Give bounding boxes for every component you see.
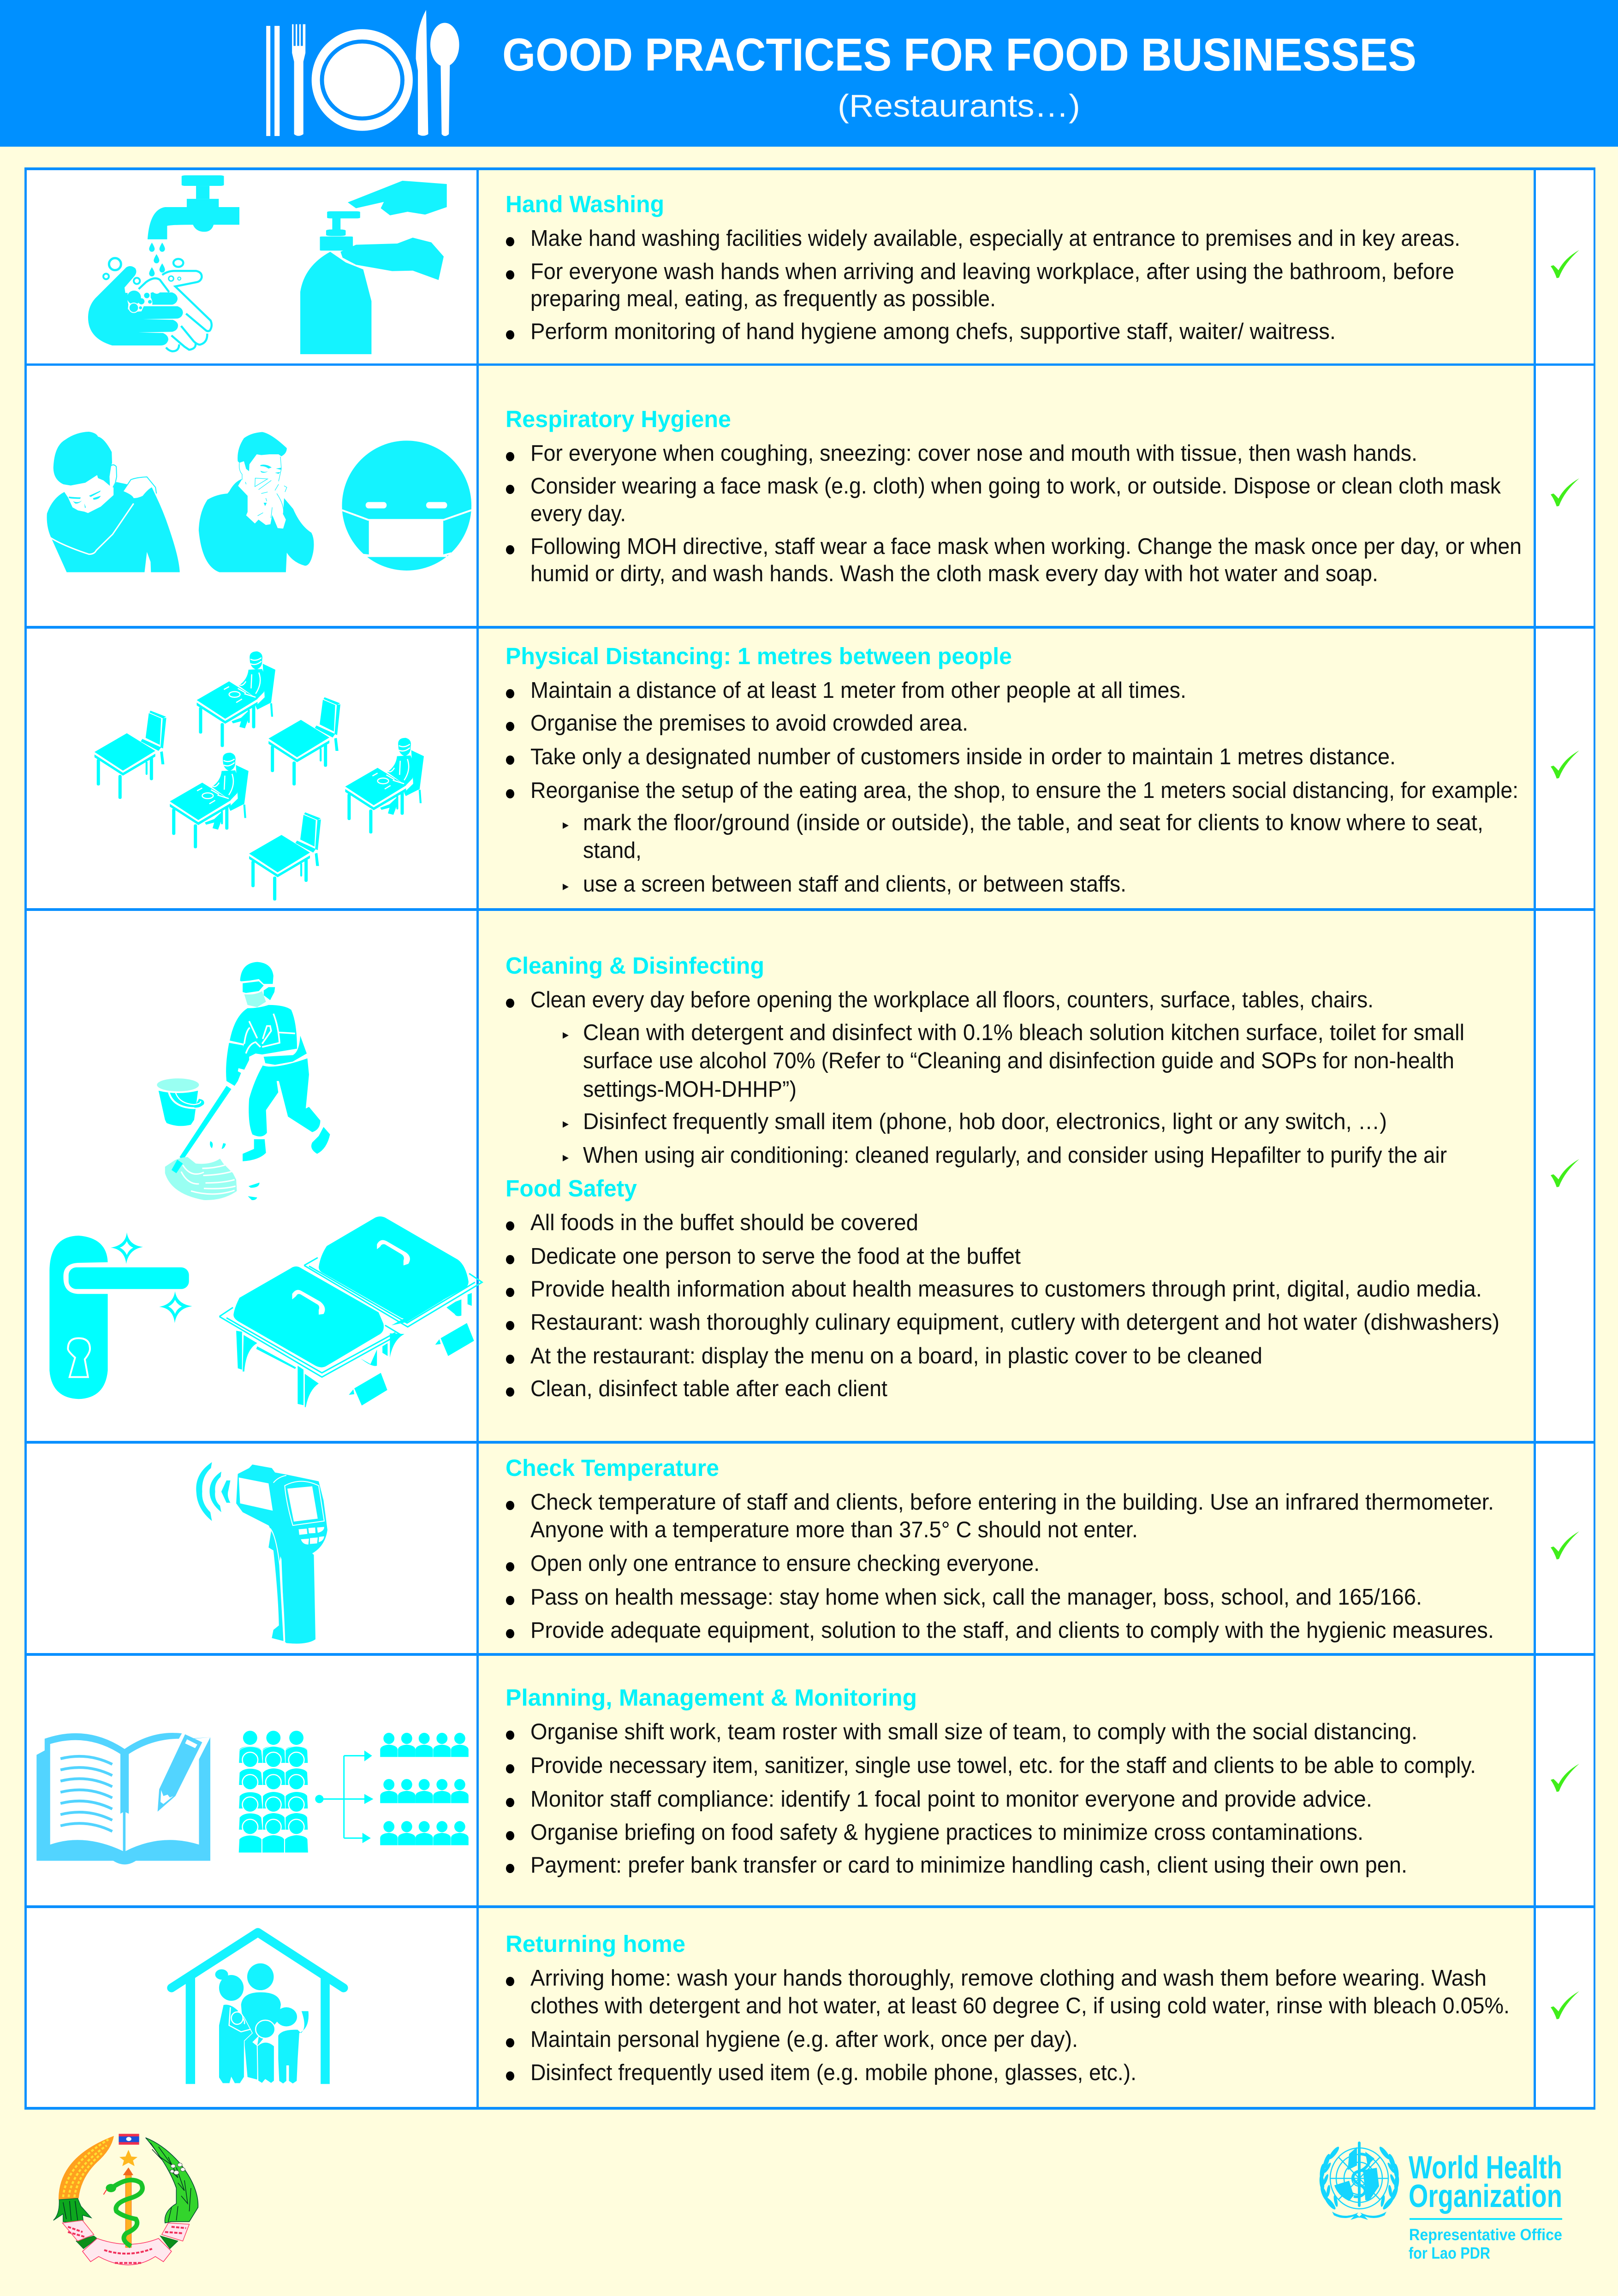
text: World Health Organization: World Health: [1409, 2149, 1562, 2185]
icon: open book with pencil: [36, 1733, 210, 1864]
panel: returning home text: [506, 1931, 1510, 2085]
list: food safety: Dedicate one person to serve the food at the buffet: [530, 1244, 1021, 1269]
list: planning: Provide necessary item, sanitizer, single use towel, etc. for the staff and clients to be able to comply.: [530, 1753, 1476, 1778]
list: respiratory hygiene: every day.: [530, 501, 626, 526]
list: check temperature: Check temperature of staff and clients, before entering in the building. Use an infrared thermometer.: [530, 1490, 1494, 1515]
check mark: returning home: [1551, 1991, 1579, 2019]
list: cleaning and disinfecting: [506, 987, 1464, 1168]
heading: cleaning and disinfecting: Cleaning & Disinfecting: [506, 952, 764, 979]
list: planning: Organise shift work, team roster with small size of team, to comply with the social distancing.: [530, 1719, 1417, 1744]
panel: hand washing text: [506, 191, 1460, 344]
icon: covered buffet trays: [220, 1216, 482, 1407]
list: cleaning and disinfecting: Clean every day before opening the workplace all floors, counters, surface, tables, chairs.: [530, 987, 1374, 1012]
icon: respiratory hygiene: [47, 432, 471, 572]
list: respiratory hygiene: Consider wearing a face mask (e.g. cloth) when going to work, or outside. Dispose or clean cloth mask: [530, 474, 1501, 499]
list: check temperature: Open only one entrance to ensure checking everyone.: [530, 1551, 1040, 1576]
heading: physical distancing: Physical Distancing: 1 metres between people: [506, 643, 1012, 669]
icon: bucket: [157, 1078, 204, 1126]
list: check temperature: [506, 1490, 1494, 1643]
icon: person coughing into elbow: [47, 432, 180, 572]
list: cleaning and disinfecting: Clean with detergent and disinfect with 0.1% bleach solution kitchen surface, toilet for small: [583, 1020, 1464, 1045]
icon: physically distanced tables: [95, 651, 424, 901]
icon: family in house: [172, 1933, 344, 2084]
list: physical distancing: stand,: [583, 838, 642, 863]
heading: respiratory hygiene: Respiratory Hygiene: [506, 406, 731, 432]
icon: planning, book and team split: [36, 1731, 469, 1864]
panel: physical distancing text: [506, 643, 1518, 897]
check mark: cleaning and food safety: [1551, 1159, 1579, 1187]
icon: cutlery and plate: [266, 10, 459, 136]
title: GOOD PRACTICES FOR FOOD BUSINESSES: [502, 29, 1416, 81]
list: check temperature: Provide adequate equipment, solution to the staff, and clients to comply with the hygienic measures.: [530, 1618, 1494, 1643]
list: food safety: Provide health information about health measures to customers through print, digital, audio media.: [530, 1277, 1482, 1302]
list: planning: [506, 1719, 1476, 1878]
check mark: hand washing: [1551, 250, 1579, 278]
list: hand washing: [506, 226, 1460, 344]
list: hand washing: For everyone wash hands when arriving and leaving workplace, after using the bathroom, before: [530, 259, 1454, 284]
list: food safety: Restaurant: wash thoroughly culinary equipment, cutlery with detergent and hot water (dishwashers): [530, 1310, 1499, 1335]
list: cleaning and disinfecting: surface use alcohol 70% (Refer to “Cleaning and disinfection guide and SOPs for non-health: [583, 1048, 1454, 1073]
logo: World Health Organization: for Lao PDR: [1409, 2244, 1490, 2262]
heading: planning: Planning, Management & Monitoring: [506, 1684, 917, 1711]
icon: person mopping: [226, 962, 330, 1161]
text: representative office: Representative Office: [1409, 2226, 1562, 2244]
heading: food safety: Food Safety: [506, 1175, 637, 1202]
list: physical distancing: mark the floor/ground (inside or outside), the table, and seat for clients to know where to seat,: [583, 810, 1483, 835]
panel: planning text: [506, 1684, 1476, 1878]
list: food safety: All foods in the buffet should be covered: [530, 1210, 918, 1235]
list: physical distancing: Maintain a distance of at least 1 meter from other people at all times.: [530, 678, 1186, 703]
panel: cleaning and food safety text: [506, 952, 1499, 1401]
check mark: physical distancing: [1551, 750, 1579, 779]
list: food safety: At the restaurant: display the menu on a board, in plastic cover to be cleaned: [530, 1344, 1262, 1368]
check mark: check temperature: [1551, 1531, 1579, 1559]
panel: respiratory hygiene text: [506, 406, 1522, 586]
list: returning home: Arriving home: wash your hands thoroughly, remove clothing and wash them before wearing. Wash: [530, 1966, 1487, 1991]
icon: mop: [165, 1086, 260, 1200]
list: returning home: Disinfect frequently used item (e.g. mobile phone, glasses, etc.).: [530, 2060, 1136, 2085]
list: cleaning and disinfecting: settings-MOH-DHHP”): [583, 1077, 797, 1102]
heading: hand washing: Hand Washing: [506, 191, 664, 217]
icon: door handle: [49, 1232, 192, 1399]
icon: hand washing: [88, 175, 447, 354]
icon: face with mask: [342, 440, 471, 571]
list: food safety: Clean, disinfect table after each client: [530, 1376, 887, 1401]
icon: cleaning and disinfecting: [49, 962, 482, 1407]
list: hand washing: Make hand washing facilities widely available, especially at entrance to premises and in key areas.: [530, 226, 1460, 251]
list: check temperature: Pass on health message: stay home when sick, call the manager, boss, school, and 165/166.: [530, 1585, 1422, 1610]
icon: hands with soap bubbles: [88, 243, 212, 351]
list: returning home: [506, 1966, 1510, 2085]
list: respiratory hygiene: [506, 441, 1522, 586]
icon: three small teams: [380, 1733, 469, 1845]
subtitle: (Restaurants…): [838, 88, 1080, 124]
emblem: WHO: [1319, 2141, 1400, 2220]
heading: returning home: Returning home: [506, 1931, 685, 1957]
logo: World Health Organization: [1319, 2141, 1562, 2262]
list: check temperature: Anyone with a temperature more than 37.5° C should not enter.: [530, 1517, 1138, 1542]
panel: check temperature text: [506, 1455, 1494, 1643]
list: food safety: [506, 1210, 1499, 1401]
header banner: [0, 0, 1618, 147]
arrows: team split: [315, 1750, 374, 1843]
list: physical distancing: Take only a designated number of customers inside in order to maintain 1 metres distance.: [530, 744, 1396, 769]
list: physical distancing: use a screen between staff and clients, or between staffs.: [583, 872, 1126, 897]
list: planning: Organise briefing on food safety & hygiene practices to minimize cross contaminations.: [530, 1820, 1363, 1845]
icon: large team: [239, 1731, 308, 1853]
list: respiratory hygiene: humid or dirty, and wash hands. Wash the cloth mask every day with hot water and soap.: [530, 561, 1378, 586]
icon: faucet and soap dispenser: [148, 175, 447, 354]
logo: Lao Ministry of Health emblem: [54, 2134, 198, 2265]
list: planning: Payment: prefer bank transfer or card to minimize handling cash, client using their own pen.: [530, 1853, 1407, 1878]
check mark: planning: [1551, 1764, 1579, 1792]
list: respiratory hygiene: For everyone when coughing, sneezing: cover nose and mouth with tissue, then wash hands.: [530, 441, 1417, 466]
list: cleaning and disinfecting: Disinfect frequently small item (phone, hob door, electronics, light or any switch, …): [583, 1109, 1387, 1134]
check mark: respiratory hygiene: [1551, 478, 1579, 506]
list: hand washing: preparing meal, eating, as frequently as possible.: [530, 286, 996, 311]
logo: World Health Organization: Organization: [1409, 2178, 1562, 2214]
list: planning: Monitor staff compliance: identify 1 focal point to monitor everyone and provide advice.: [530, 1787, 1372, 1812]
icon: infrared thermometer: [196, 1462, 327, 1644]
heading: check temperature: Check Temperature: [506, 1455, 719, 1481]
list: returning home: Maintain personal hygiene (e.g. after work, once per day).: [530, 2027, 1078, 2052]
list: cleaning and disinfecting: When using air conditioning: cleaned regularly, and consider using Hepafilter to purify the air: [583, 1143, 1447, 1168]
list: physical distancing: [506, 678, 1518, 897]
list: physical distancing: Reorganise the setup of the eating area, the shop, to ensure the 1 meters social distancing, for example:: [530, 778, 1518, 803]
list: respiratory hygiene: Following MOH directive, staff wear a face mask when working. Change the mask once per day, or when: [530, 534, 1522, 559]
list: physical distancing: Organise the premises to avoid crowded area.: [530, 711, 968, 736]
icon: person sneezing into tissue: [199, 432, 314, 572]
list: returning home: clothes with detergent and hot water, at least 60 degree C, if using cold water, rinse with bleach 0.05%.: [530, 1993, 1510, 2018]
list: hand washing: Perform monitoring of hand hygiene among chefs, supportive staff, waiter/ waitress.: [530, 319, 1336, 344]
